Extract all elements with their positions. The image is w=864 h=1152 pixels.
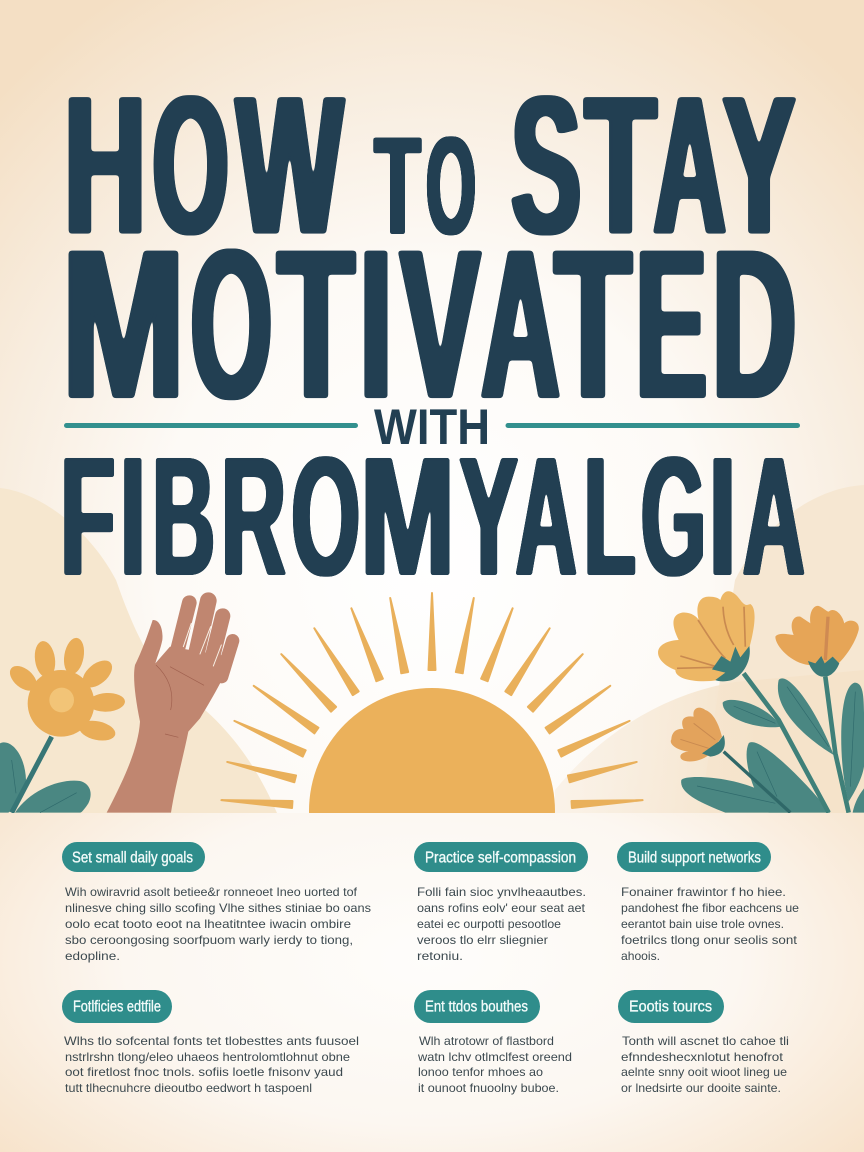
title line: fibromyalgia: O	[291, 422, 360, 612]
icon: right flowers with leaves	[658, 591, 864, 813]
body text: efnndeshecxnlotut henofrot	[621, 1050, 784, 1064]
body text: Wlh atrotowr of flastbord	[419, 1034, 554, 1048]
body text: eerantot bain uise trole ovnes.	[621, 917, 784, 931]
title line: how: W	[236, 54, 343, 276]
title line: with: WITH	[374, 399, 490, 455]
title line: motivated: T	[554, 205, 632, 444]
body text: Folli fain sioc ynvlheaautbes.	[417, 885, 586, 899]
title line: stay: A	[654, 54, 726, 276]
title: O	[426, 107, 476, 264]
body text: ahoois.	[621, 949, 660, 963]
stems	[744, 673, 829, 813]
pill label: Eootis tourcs	[629, 998, 712, 1016]
title line: stay: S	[511, 54, 581, 276]
body text: it ounoot fnuoolny buboe.	[418, 1081, 559, 1095]
body text: oolo ecat tooto eoot na lheatitntee iwacin ombire	[65, 917, 351, 931]
body text	[621, 1034, 789, 1095]
body text: foetrilcs tlong onur seolis sont	[621, 933, 798, 947]
body text	[65, 885, 371, 963]
left divider line	[64, 423, 358, 428]
right divider line	[506, 423, 800, 428]
leaves	[681, 678, 864, 813]
body text: edopline.	[65, 949, 120, 963]
tip: set small daily goals	[62, 842, 371, 963]
title line: motivated: A	[481, 205, 560, 444]
pill label: Practice self-compassion	[425, 850, 576, 866]
body text	[417, 1034, 572, 1095]
small flower	[671, 708, 722, 761]
pill	[414, 842, 588, 872]
body text: watn lchv otlmclfest oreend	[417, 1050, 572, 1064]
body text: nstrlrshn tlong/eleo uhaeos hentrolomtlohnut obne	[65, 1050, 350, 1064]
title line: stay: Y	[723, 54, 796, 276]
title line: how: H	[64, 54, 146, 276]
body text: eatei ec ourpotti pesootloe	[417, 917, 561, 931]
pill label: Set small daily goals	[72, 850, 193, 866]
title	[60, 54, 805, 612]
body text: Tonth will ascnet tlo cahoe tli	[622, 1034, 789, 1048]
body text: oans rofins eolv' eour seat aet	[417, 901, 586, 915]
title line: fibromyalgia: G	[641, 422, 706, 612]
body text: or lnedsirte our dooite sainte.	[621, 1081, 781, 1095]
tip: fotlficies edtfile	[62, 990, 359, 1095]
body text: aelnte snny ooit wioot lineg ue	[621, 1065, 787, 1079]
title line: fibromyalgia: A	[743, 422, 805, 612]
title line: to: T	[374, 107, 421, 264]
pill	[617, 842, 771, 872]
pill	[618, 990, 724, 1023]
tip: eootis tourcs	[618, 990, 789, 1095]
body text: nlinesve ching sillo scofing Vlhe sithes stiniae bo oans	[65, 901, 371, 915]
sun with rays	[221, 593, 643, 934]
icon: raised hand	[107, 601, 238, 813]
right flower	[775, 606, 859, 665]
title line: motivated: O	[191, 205, 272, 444]
title line: motivated: T	[277, 205, 355, 444]
body text	[417, 885, 586, 963]
large flower	[658, 591, 755, 681]
body text: Fonainer frawintor f ho hiee.	[621, 885, 786, 899]
body text: tutt tlhecnuhcre dieoutbo eedwort h taspoenl	[65, 1081, 312, 1095]
body text: lonoo tenfor mhoes ao	[418, 1065, 543, 1079]
body text: sbo ceroongosing soorfpuom warly ierdy to tiong,	[65, 933, 353, 947]
body text: Wlhs tlo sofcental fonts tet tlobesttes ants fuusoel	[64, 1034, 359, 1048]
pill	[414, 990, 540, 1023]
title line: how: O	[153, 54, 229, 276]
title line: fibromyalgia: L	[584, 422, 636, 612]
title line: motivated: V	[400, 205, 480, 444]
tip: build support networks	[617, 842, 799, 963]
title line: fibromyalgia: R	[221, 422, 286, 612]
title line: motivated: M	[62, 205, 185, 444]
body text: veroos tlo elrr sliegnier	[417, 933, 548, 947]
title line: motivated: E	[636, 205, 707, 444]
tip: practice self-compassion	[414, 842, 588, 963]
pill label: Build support networks	[628, 850, 761, 866]
body text	[64, 1034, 359, 1095]
title line: fibromyalgia: A	[516, 422, 577, 612]
title line: motivated: I	[360, 205, 392, 444]
bottom panel	[0, 813, 864, 1152]
title line: fibromyalgia: Y	[459, 422, 518, 612]
pill label: Ent ttdos bouthes	[425, 998, 528, 1016]
icon: left flower with leaves	[0, 636, 125, 813]
title line: fibromyalgia: M	[360, 422, 455, 612]
pill label: Fotlficies edtfile	[73, 998, 161, 1016]
pill	[62, 842, 205, 872]
pill	[62, 990, 172, 1023]
title line: fibromyalgia: I	[709, 422, 736, 612]
left background hill	[0, 488, 277, 813]
body text: retoniu.	[417, 949, 463, 963]
right background hills	[555, 485, 864, 813]
title line: fibromyalgia: F	[60, 422, 115, 612]
title line: fibromyalgia: I	[120, 422, 146, 612]
tip: ent ttdos bouthes	[414, 990, 572, 1095]
title line: fibromyalgia: B	[152, 422, 215, 612]
body text: pandohest fhe fibor eachcens ue	[621, 901, 799, 915]
body text	[621, 885, 799, 963]
body text: Wih owiravrid asolt betiee&r ronneoet Ineo uorted tof	[65, 885, 358, 899]
title line: stay: T	[585, 54, 656, 276]
title line: motivated: D	[712, 205, 796, 444]
body text: oot firetlost fnoc tnols. sofiis loetle fnisonv yaud	[65, 1065, 343, 1079]
